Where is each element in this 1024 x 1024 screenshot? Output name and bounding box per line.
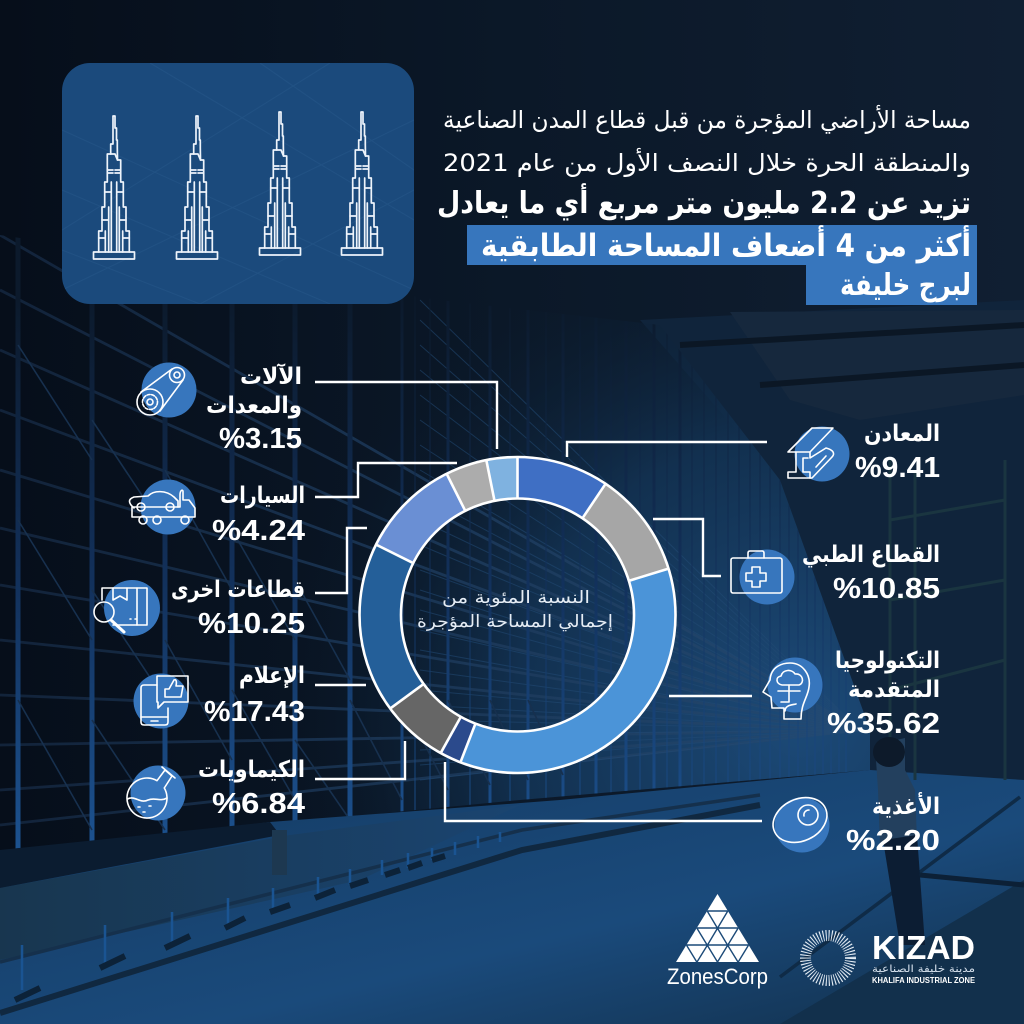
item: medical bbox=[731, 542, 940, 605]
heading text block: لبرج خليفة bbox=[840, 268, 971, 303]
item: machinery and equipment bbox=[137, 362, 302, 455]
item: machinery and equipment: الآلات bbox=[240, 363, 302, 390]
item: other sectors bbox=[94, 577, 305, 640]
item: cars bbox=[130, 480, 305, 547]
icon: flask bbox=[127, 767, 175, 818]
donut chart bbox=[360, 457, 676, 773]
item: chemicals: %6.84 bbox=[212, 788, 305, 820]
heading text block bbox=[437, 105, 977, 305]
icon: tow truck bbox=[130, 490, 195, 524]
item: medical: القطاع الطبي bbox=[802, 542, 940, 568]
icon: head with cloud bbox=[763, 663, 809, 719]
logo: KIZAD: KHALIFA INDUSTRIAL ZONE bbox=[872, 976, 976, 985]
item: chemicals: الكيماويات bbox=[198, 757, 305, 783]
item: cars: %4.24 bbox=[212, 515, 305, 547]
heading text block: أكثر من 4 أضعاف المساحة الطابقية bbox=[481, 225, 971, 264]
item: food: %2.20 bbox=[846, 825, 940, 857]
item: media: %17.43 bbox=[204, 696, 305, 728]
icon: tower 4 bbox=[342, 112, 382, 255]
icon: tower 3 bbox=[260, 112, 300, 255]
icon: box and magnifier bbox=[94, 588, 147, 632]
icon: steel beam bbox=[788, 428, 834, 478]
item: machinery and equipment: %3.15 bbox=[219, 423, 302, 455]
icon: first aid kit bbox=[731, 551, 782, 593]
icon: phone and like bbox=[141, 676, 188, 725]
item: media bbox=[134, 663, 305, 728]
logo: KIZAD: مدينة خليفة الصناعية bbox=[872, 964, 975, 975]
highlight bar line 1 bbox=[467, 225, 977, 265]
logo: ZonesCorp bbox=[667, 894, 768, 989]
highlight bar line 2 bbox=[806, 265, 977, 305]
item: advanced technology bbox=[763, 648, 940, 740]
item: machinery and equipment: والمعدات bbox=[206, 393, 302, 419]
heading text block: مساحة الأراضي المؤجرة من قبل قطاع المدن الصناعية bbox=[443, 105, 971, 134]
item: advanced technology: التكنولوجيا bbox=[835, 648, 940, 674]
heading text block: والمنطقة الحرة خلال النصف الأول من عام 2021 bbox=[443, 148, 971, 177]
item: advanced technology: %35.62 bbox=[827, 708, 940, 740]
item: cars: السيارات bbox=[220, 483, 305, 509]
heading text block: تزيد عن 2.2 مليون متر مربع أي ما يعادل bbox=[437, 183, 971, 221]
icon: egg bbox=[766, 789, 834, 851]
item: advanced technology: المتقدمة bbox=[848, 677, 940, 703]
item: food bbox=[766, 789, 940, 857]
item: medical: %10.85 bbox=[833, 573, 940, 605]
item: media: الإعلام bbox=[239, 663, 305, 689]
donut center label: إجمالي المساحة المؤجرة bbox=[417, 612, 613, 632]
icon: tower 2 bbox=[176, 116, 218, 259]
item: metals: المعادن bbox=[864, 421, 940, 447]
logo: KIZAD: KIZAD bbox=[872, 929, 975, 966]
icon: tower 1 bbox=[94, 116, 134, 259]
donut center label bbox=[417, 588, 613, 632]
logo: KIZAD bbox=[806, 929, 976, 985]
logo: ZonesCorp: ZonesCorp bbox=[667, 964, 768, 989]
panel: Burj Khalifa towers bbox=[62, 63, 414, 304]
item: metals: %9.41 bbox=[855, 452, 940, 484]
donut center label: النسبة المئوية من bbox=[442, 588, 590, 608]
logo mark: sun ring bbox=[806, 936, 850, 980]
item: other sectors: قطاعات اخرى bbox=[171, 577, 305, 603]
item: other sectors: %10.25 bbox=[198, 608, 305, 640]
item: chemicals bbox=[127, 757, 305, 820]
item: food: الأغذية bbox=[872, 791, 940, 820]
leader lines bbox=[315, 382, 767, 821]
icon: belt and gear bbox=[137, 368, 184, 415]
item: metals bbox=[788, 421, 940, 484]
